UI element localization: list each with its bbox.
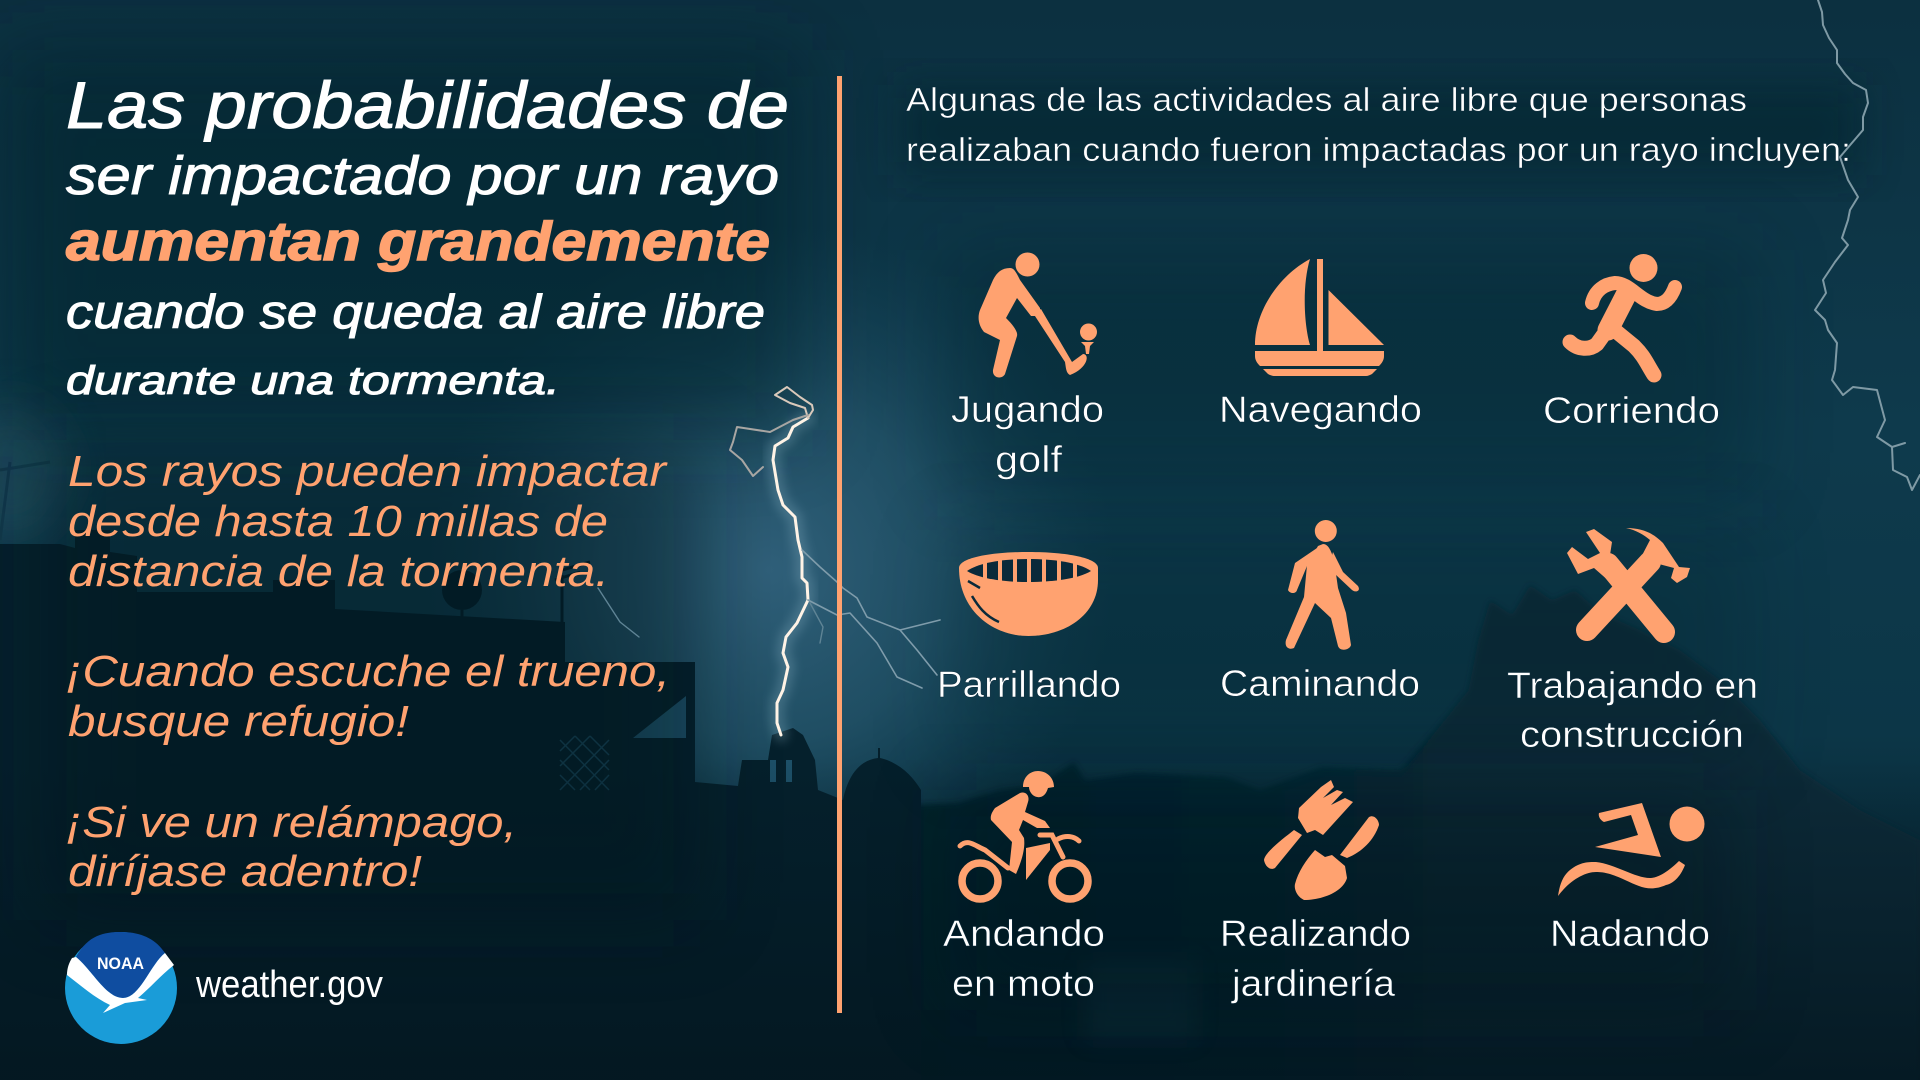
divider line: [837, 76, 842, 1013]
icon: runner: [1570, 254, 1675, 375]
icon: hammer and wrench: [1567, 528, 1690, 632]
activity: construction: [1507, 528, 1758, 755]
activity: gardening: [1220, 780, 1411, 1004]
safety messages: diríjase adentro!: [68, 847, 422, 896]
intro text: realizaban cuando fueron impactadas por un rayo incluyen:: [906, 131, 1851, 168]
icon: swimmer: [1558, 803, 1704, 896]
activity: walking: Caminando: [1220, 663, 1420, 704]
safety messages: busque refugio!: [68, 697, 409, 746]
safety messages: desde hasta 10 millas de: [68, 497, 608, 546]
icon: golfer: [979, 252, 1097, 377]
activity: motorbike: Andando: [943, 913, 1105, 954]
activity: walking: [1220, 520, 1420, 704]
activity: golf: golf: [995, 439, 1063, 480]
activity: sailing: Navegando: [1219, 389, 1422, 430]
intro text: [906, 81, 1851, 168]
intro text: Algunas de las actividades al aire libre que personas: [906, 81, 1747, 118]
activity: grilling: Parrillando: [937, 664, 1121, 705]
icon: grill: [959, 552, 1098, 636]
activity: golf: Jugando: [951, 389, 1104, 430]
main heading: aumentan grandemente: [66, 210, 770, 272]
activity: golf: [951, 252, 1104, 480]
icon: fork and trowel: [1264, 780, 1379, 900]
activity: motorbike: [943, 771, 1105, 1004]
activity: sailing: [1219, 259, 1422, 430]
main heading: cuando se queda al aire libre: [66, 285, 765, 338]
activity: gardening: Realizando: [1220, 913, 1411, 954]
icon: motorcycle rider: [960, 771, 1088, 899]
safety messages: Los rayos pueden impactar: [68, 447, 669, 496]
activity: grilling: [937, 552, 1121, 705]
lightning: central bolt: [598, 387, 940, 735]
activity: running: [1543, 254, 1720, 431]
NOAA logo: NOAA: [97, 954, 144, 973]
lightning: right-edge bolt: [1815, 0, 1920, 490]
icon: sailboat: [1255, 259, 1384, 376]
weather.gov link text: weather.gov: [195, 964, 383, 1006]
activity: running: Corriendo: [1543, 390, 1720, 431]
activity: construction: construcción: [1520, 714, 1744, 755]
activity: motorbike: en moto: [952, 963, 1095, 1004]
icon: walker: [1286, 520, 1359, 650]
safety messages: ¡Cuando escuche el trueno,: [66, 647, 670, 696]
main heading: ser impactado por un rayo: [66, 146, 779, 206]
safety messages: distancia de la tormenta.: [68, 547, 609, 596]
activity: swimming: Nadando: [1550, 913, 1710, 954]
activity: construction: Trabajando en: [1507, 665, 1758, 706]
activity: swimming: [1550, 803, 1710, 954]
main heading: [66, 68, 789, 403]
safety messages: [66, 447, 670, 896]
activity: gardening: jardinería: [1231, 963, 1395, 1004]
safety messages: ¡Si ve un relámpago,: [66, 798, 517, 847]
NOAA logo: [65, 932, 177, 1044]
main heading: Las probabilidades de: [66, 68, 789, 142]
decorative far skyline and trees: [915, 585, 1920, 1080]
main heading: durante una tormenta.: [66, 359, 560, 403]
